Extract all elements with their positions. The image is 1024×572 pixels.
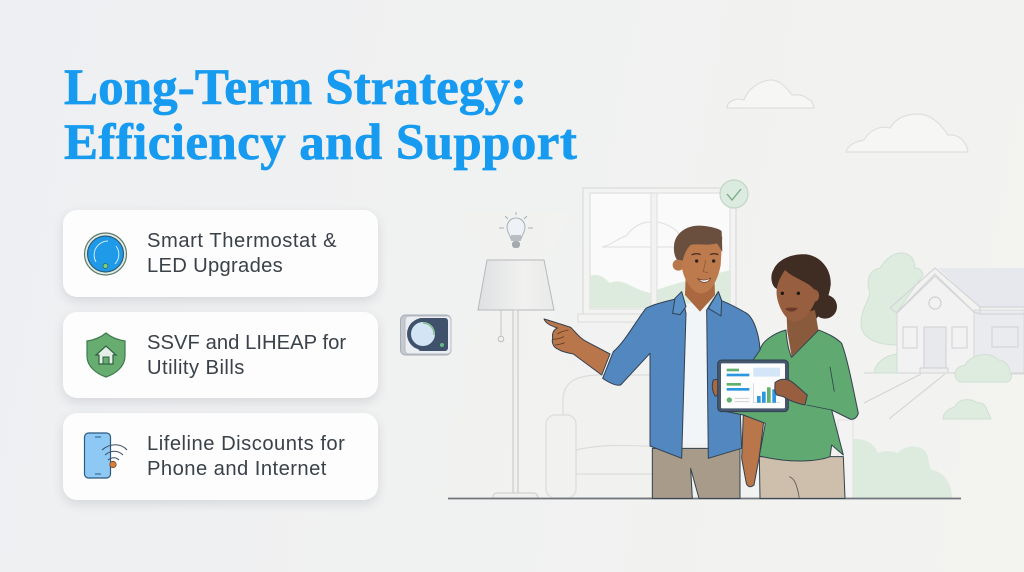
text [147,432,345,480]
card: thermostat and LED [63,210,378,297]
text: Smart Thermostat & [147,230,337,252]
card: Lifeline discounts [63,413,378,500]
window [578,188,736,322]
cloud: large [846,114,968,152]
man [544,226,760,498]
text: LED Upgrades [147,255,283,277]
shrubs [874,354,1011,419]
cloud: small [727,80,814,108]
house [864,268,1024,419]
tablet [712,360,807,412]
wall thermostat [400,315,451,355]
floor lamp [478,260,554,498]
check badge [720,180,748,208]
icon: phone with wifi [84,432,128,479]
title: Efficiency and Support [64,115,577,171]
card: SSVF and LIHEAP [63,312,378,398]
text [147,332,346,379]
light bulb icon [499,212,533,248]
people: couple [544,226,858,498]
woman [718,254,858,498]
title [64,60,577,171]
floor line [448,498,961,500]
sofa edge behind woman [838,420,853,498]
text [147,230,337,277]
text: SSVF and LIHEAP for [147,332,346,354]
armchair [546,375,660,498]
text: Lifeline Discounts for [147,432,345,454]
title: Long-Term Strategy: [64,60,527,116]
text: Phone and Internet [147,458,327,480]
man's lowered arm [742,414,764,487]
icon: smart thermostat [84,232,128,276]
icon: shield with house [86,332,126,378]
tree behind house [861,253,923,345]
text: Utility Bills [147,357,245,379]
large bush [853,439,952,498]
light glow from lamp [440,212,600,498]
